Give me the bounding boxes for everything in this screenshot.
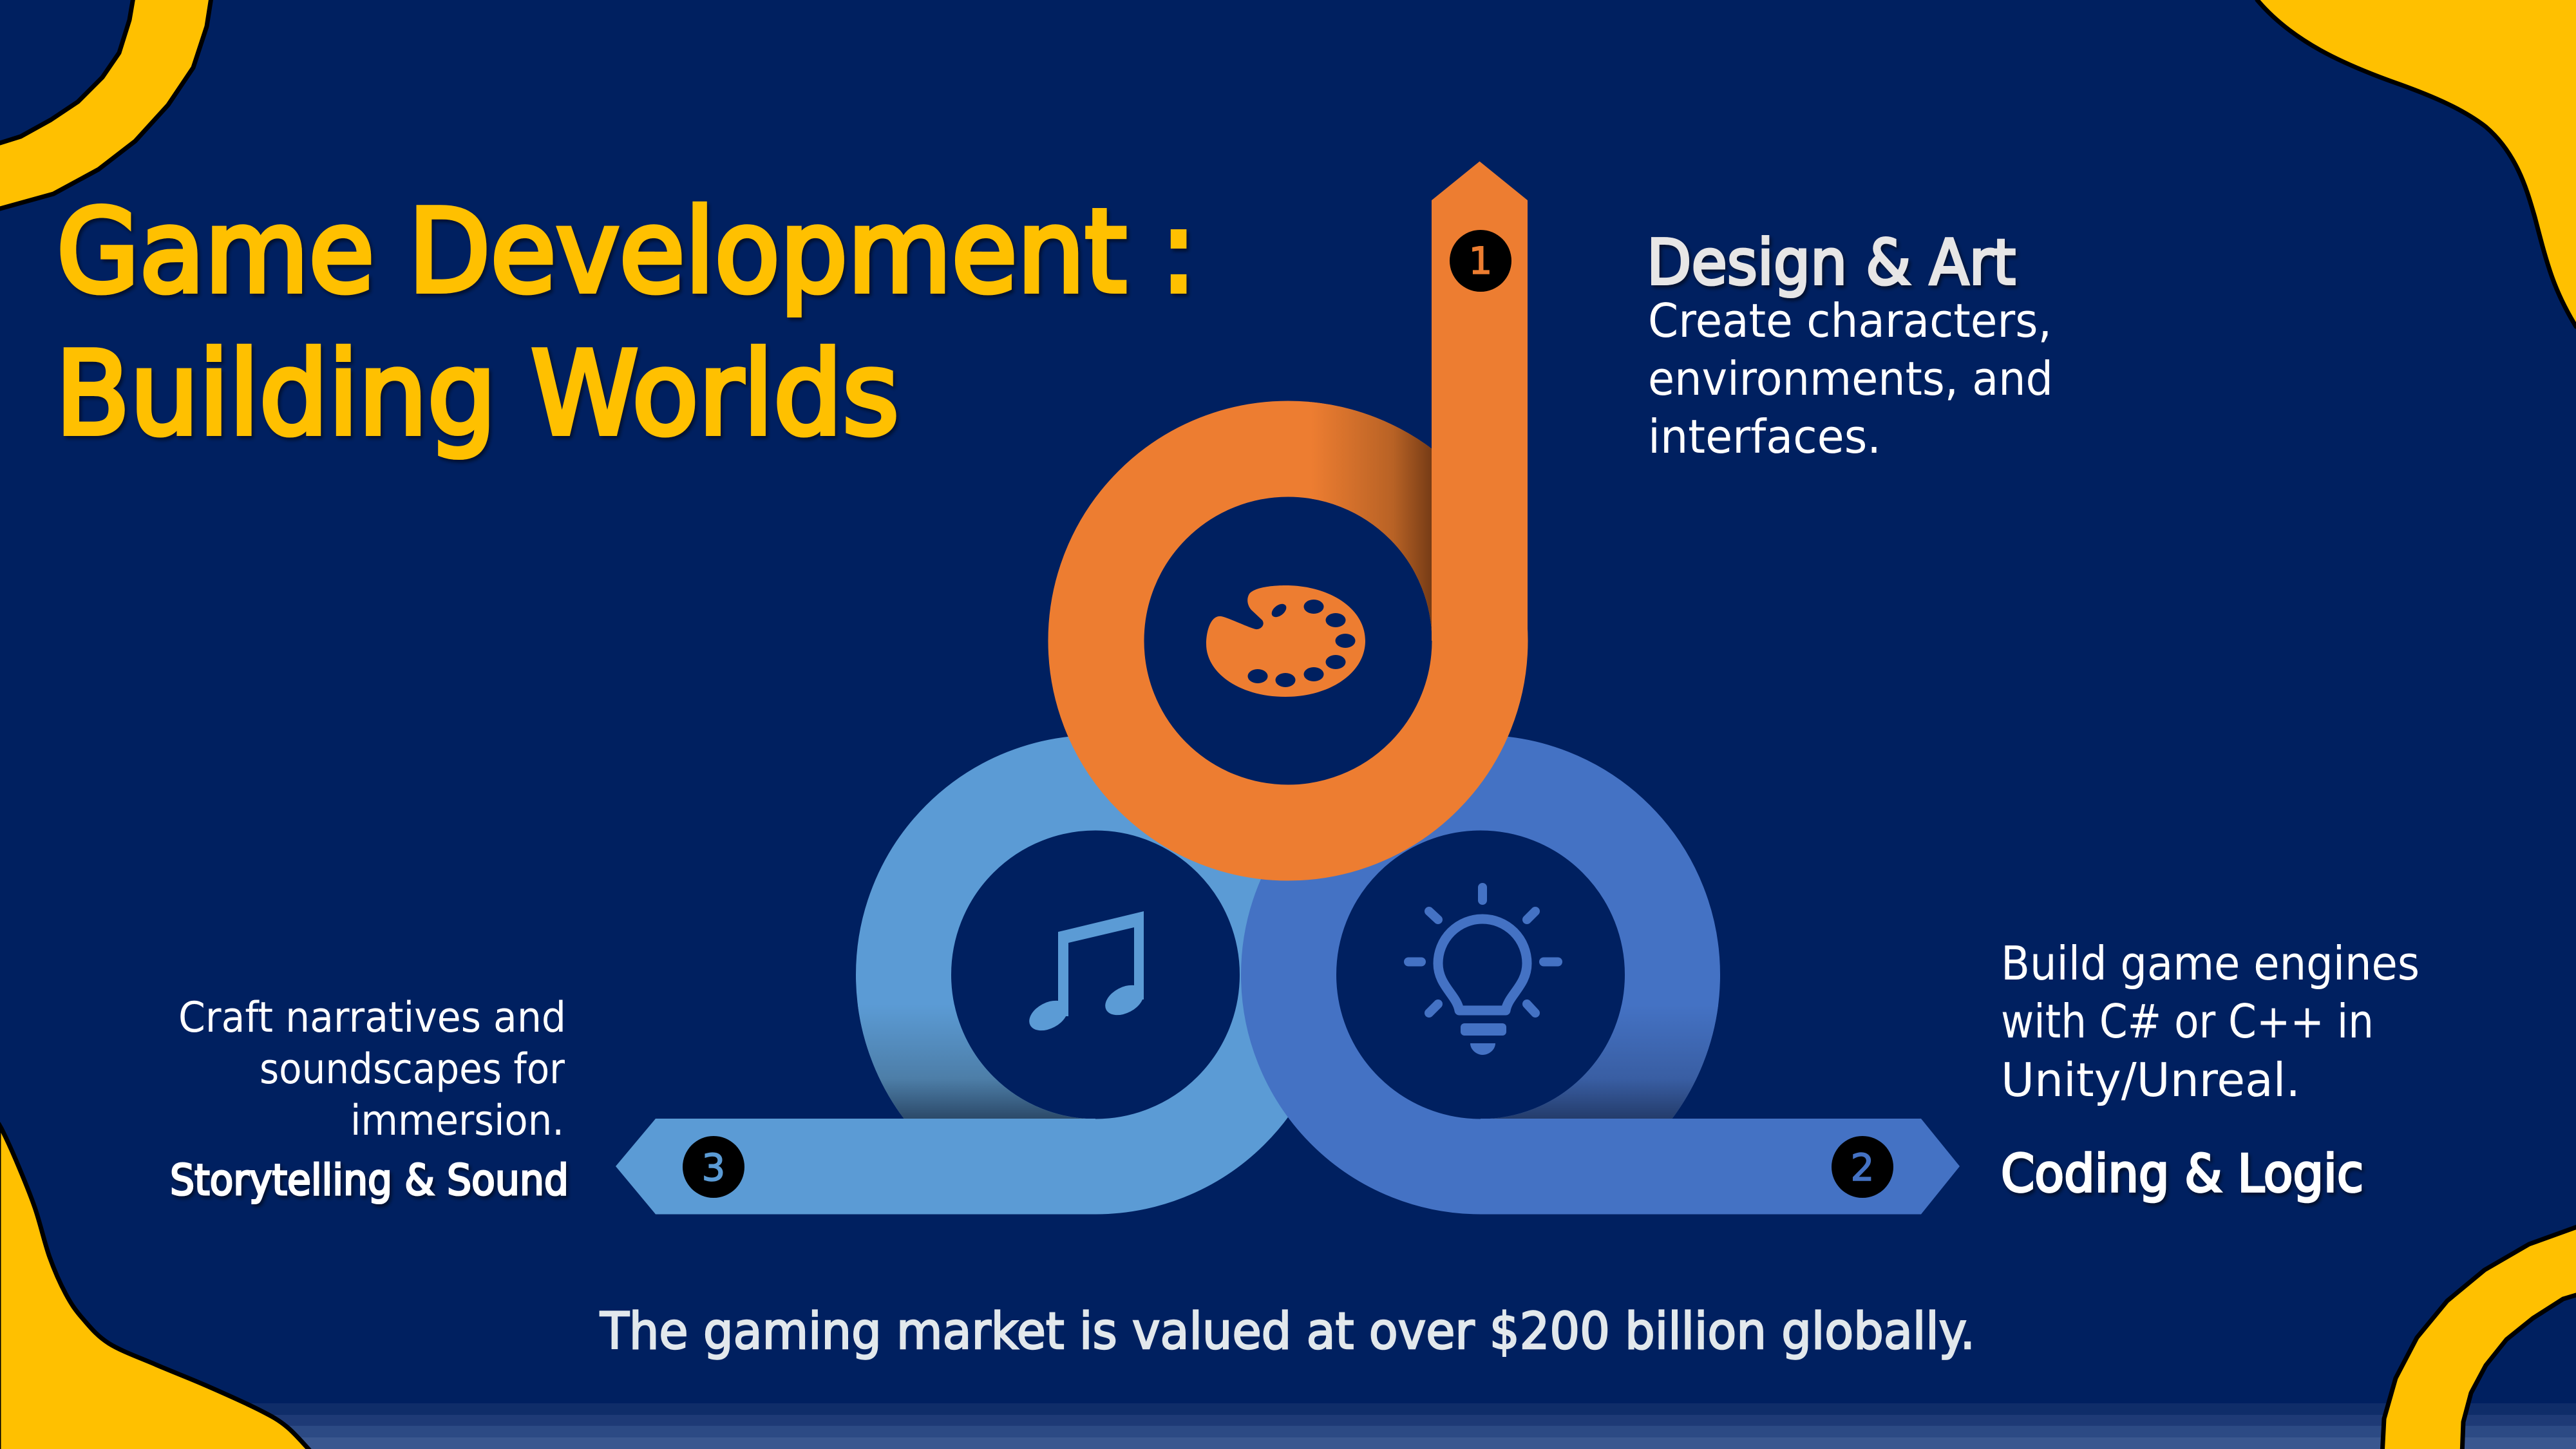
title <box>55 185 1197 460</box>
text block: design and art <box>1647 226 2053 464</box>
text block: storytelling and sound <box>170 994 569 1205</box>
body: storytelling and sound: soundscapes for <box>260 1045 565 1094</box>
body: design and art: Create characters, <box>1648 294 2052 348</box>
body: design and art <box>1648 294 2053 464</box>
step badge 3 <box>683 1136 744 1198</box>
footer statistic: The gaming market is valued at over $200 billion globally. <box>600 1303 1975 1361</box>
title: Game Development : <box>57 185 1197 318</box>
step badge 1 <box>1450 230 1511 292</box>
icon: light bulb <box>1408 887 1558 1055</box>
corner shape: top left <box>0 0 212 209</box>
heading: coding and logic: Coding & Logic <box>2001 1144 2363 1204</box>
heading: storytelling and sound: Storytelling & Sound <box>170 1155 569 1205</box>
corner shape: top right <box>2257 0 2576 327</box>
icon: music note <box>1024 911 1149 1037</box>
step badge 2: 2 <box>1851 1146 1874 1189</box>
corner shape: bottom right <box>2382 1225 2576 1449</box>
bottom gradient stripe <box>0 1403 2576 1449</box>
arrow band 2 <box>1481 1119 1960 1215</box>
body: design and art: interfaces. <box>1648 410 1881 464</box>
body: coding and logic: Build game engines <box>2001 936 2420 990</box>
step badge 2 <box>1832 1136 1893 1198</box>
icon: artist palette <box>1206 585 1365 697</box>
step badge 1: 1 <box>1469 239 1492 283</box>
heading: design and art: Design & Art <box>1647 226 2016 299</box>
body: storytelling and sound <box>178 994 566 1145</box>
body: design and art: environments, and <box>1648 352 2053 406</box>
body: coding and logic: with C# or C++ in <box>2001 994 2374 1048</box>
ring 3: storytelling and sound <box>616 783 1287 1215</box>
body: coding and logic: Unity/Unreal. <box>2001 1053 2300 1107</box>
body: storytelling and sound: Craft narratives and <box>178 994 566 1042</box>
body: coding and logic <box>2001 936 2420 1107</box>
text block: coding and logic <box>2001 936 2420 1204</box>
ring 2: coding and logic <box>1289 783 1960 1215</box>
title: Building Worlds <box>55 327 899 460</box>
arrow stem 1 <box>1432 162 1528 641</box>
arrow band 3 <box>616 1119 1095 1215</box>
step badge 3: 3 <box>702 1146 725 1189</box>
corner shape: bottom left <box>0 1124 314 1449</box>
body: storytelling and sound: immersion. <box>350 1097 564 1145</box>
ring 1: design and art <box>1096 162 1528 833</box>
